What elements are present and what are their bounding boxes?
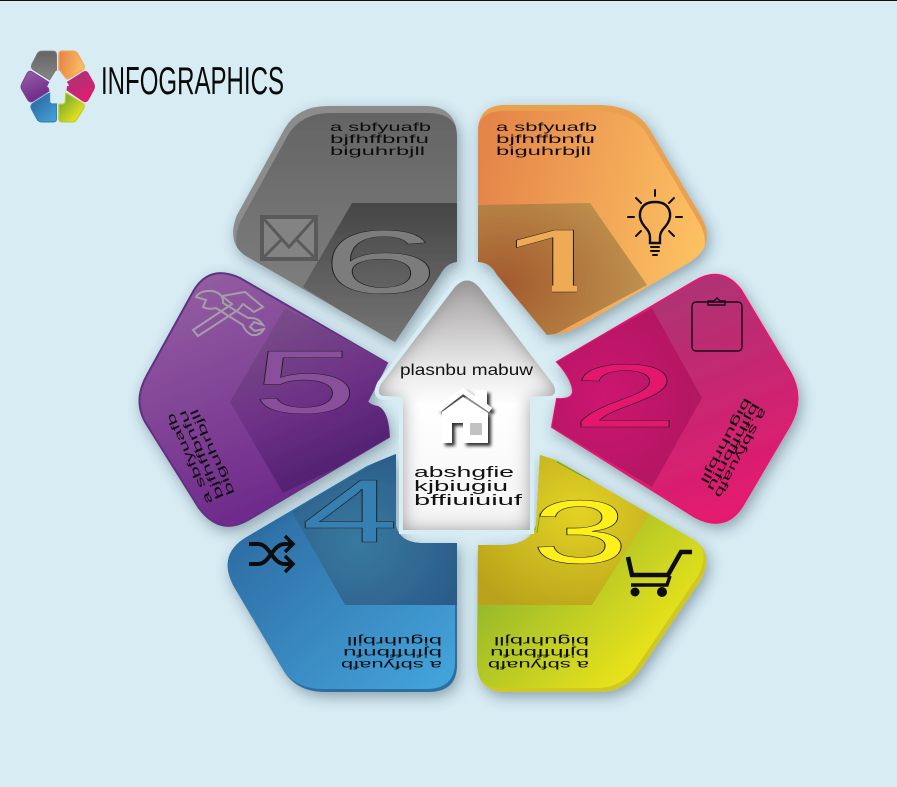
number 3: 3 (531, 482, 629, 582)
central heading: plasnbu mabuw (400, 362, 534, 379)
central body text: kjbiugiu (414, 478, 508, 495)
text: panel 3: bjfhffbnfu (490, 646, 589, 660)
central body text (414, 464, 524, 509)
text: panel 6: bjfhffbnfu (330, 132, 429, 146)
text: panel 4 (340, 634, 442, 672)
text: panel 4: a sbfyuafb (340, 658, 442, 672)
text: panel 4: bjfhffbnfu (343, 646, 442, 660)
panel 1: orange (476, 105, 707, 341)
text: panel 3: biguhrbjll (494, 634, 589, 648)
number 4: 4 (301, 461, 399, 561)
text: panel 1: a sbfyuafb (496, 120, 598, 134)
central house panel (379, 280, 555, 530)
number 1: 1 (494, 211, 624, 311)
text: panel 6: biguhrbjll (330, 144, 425, 158)
icon: shuffle arrows (249, 536, 293, 572)
panel 5: purple (140, 273, 395, 526)
text: panel 5: bjfhffbnfu (177, 408, 227, 501)
icon: light bulb (628, 190, 682, 255)
text: panel 1: bjfhffbnfu (496, 132, 595, 146)
text: panel 1: biguhrbjll (496, 144, 591, 158)
title: INFOGRAPHICS (101, 60, 284, 103)
text: panel 3 (487, 634, 589, 672)
text: panel 5: a sbfyuafb (165, 411, 216, 506)
number 6: 6 (321, 212, 439, 312)
icon: shopping cart (628, 552, 692, 597)
text: panel 6: a sbfyuafb (330, 120, 432, 134)
panel 6: grey (233, 106, 460, 349)
icon: clipboard (692, 298, 742, 351)
text: panel 5: biguhrbjll (189, 407, 238, 497)
text: panel 6 (330, 120, 432, 158)
icon: house (437, 388, 492, 443)
number 2: 2 (571, 345, 679, 446)
panel 3: yellow green (470, 450, 706, 692)
top border line (0, 0, 897, 1)
number 5: 5 (252, 332, 358, 432)
panel 4: blue (226, 450, 460, 692)
text: panel 2: bjfhffbnfu (704, 401, 761, 493)
text: panel 5 (165, 407, 238, 506)
text: panel 2: a sbfyuafb (711, 406, 769, 500)
text: panel 3: a sbfyuafb (487, 658, 589, 672)
panel 2: magenta (540, 275, 798, 523)
text: panel 2 (698, 396, 769, 500)
icon: envelope (262, 217, 316, 259)
text: panel 4: biguhrbjll (347, 634, 442, 648)
icon: wrench and hammer (193, 291, 264, 336)
central body text: bffiuiuiuf (414, 492, 524, 509)
text: panel 1 (496, 120, 598, 158)
logo mark (21, 51, 94, 122)
text: panel 2: biguhrbjll (698, 396, 753, 485)
central body text: abshgfie (414, 464, 514, 481)
